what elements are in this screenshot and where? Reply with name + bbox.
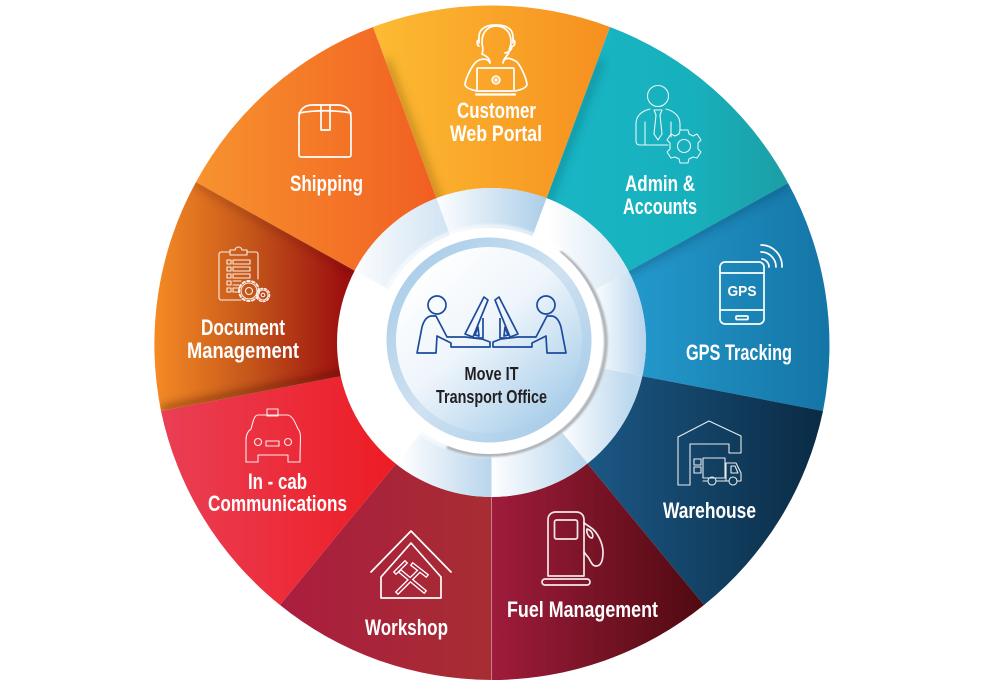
label: Communications bbox=[208, 491, 347, 516]
inner rings bbox=[373, 224, 607, 458]
label: Workshop bbox=[365, 615, 448, 640]
label bbox=[623, 171, 697, 219]
label bbox=[208, 469, 347, 516]
panel: shipping bbox=[196, 27, 492, 347]
label: Customer bbox=[457, 98, 536, 123]
label: Admin & bbox=[625, 171, 695, 196]
label bbox=[450, 98, 542, 146]
panel: warehouse bbox=[492, 347, 823, 605]
centre label bbox=[436, 364, 547, 407]
icon: house with crossed hammers bbox=[371, 531, 451, 598]
centre label: Transport Office bbox=[436, 387, 547, 407]
icon: clipboard with gears bbox=[219, 247, 270, 302]
label: Accounts bbox=[623, 194, 697, 219]
icon: parcel box bbox=[299, 105, 351, 157]
divider between workshop and fuel bbox=[490, 497, 492, 680]
icon: two people at computers bbox=[417, 296, 566, 353]
panel: admin and accounts bbox=[546, 27, 788, 272]
infographic wheel bbox=[154, 6, 830, 680]
icon: taxi bbox=[246, 409, 300, 462]
panel: in-cab communications bbox=[161, 347, 492, 605]
label: Shipping bbox=[290, 171, 363, 196]
centre hub disc bbox=[337, 188, 646, 497]
label: Warehouse bbox=[663, 498, 756, 523]
icon: warehouse with truck bbox=[678, 421, 741, 485]
panel: customer web portal bbox=[373, 6, 610, 198]
label: Management bbox=[187, 338, 300, 363]
icon: fuel pump bbox=[542, 512, 603, 585]
icon: businessman with gear bbox=[636, 86, 701, 163]
icon: gps phone bbox=[720, 245, 782, 324]
label: Document bbox=[201, 315, 286, 340]
panel: workshop bbox=[280, 464, 492, 680]
label: GPS Tracking bbox=[686, 340, 792, 365]
centre label: Move IT bbox=[464, 364, 518, 384]
label bbox=[187, 315, 300, 363]
label: Web Portal bbox=[450, 121, 542, 146]
icon: headset agent at laptop bbox=[465, 25, 527, 94]
panel: gps tracking bbox=[628, 183, 830, 411]
label: Fuel Management bbox=[507, 597, 659, 622]
icon: gps phone: GPS bbox=[728, 283, 756, 300]
panel: fuel management bbox=[492, 347, 704, 680]
label: In - cab bbox=[248, 469, 307, 494]
panel: document management bbox=[154, 182, 355, 411]
